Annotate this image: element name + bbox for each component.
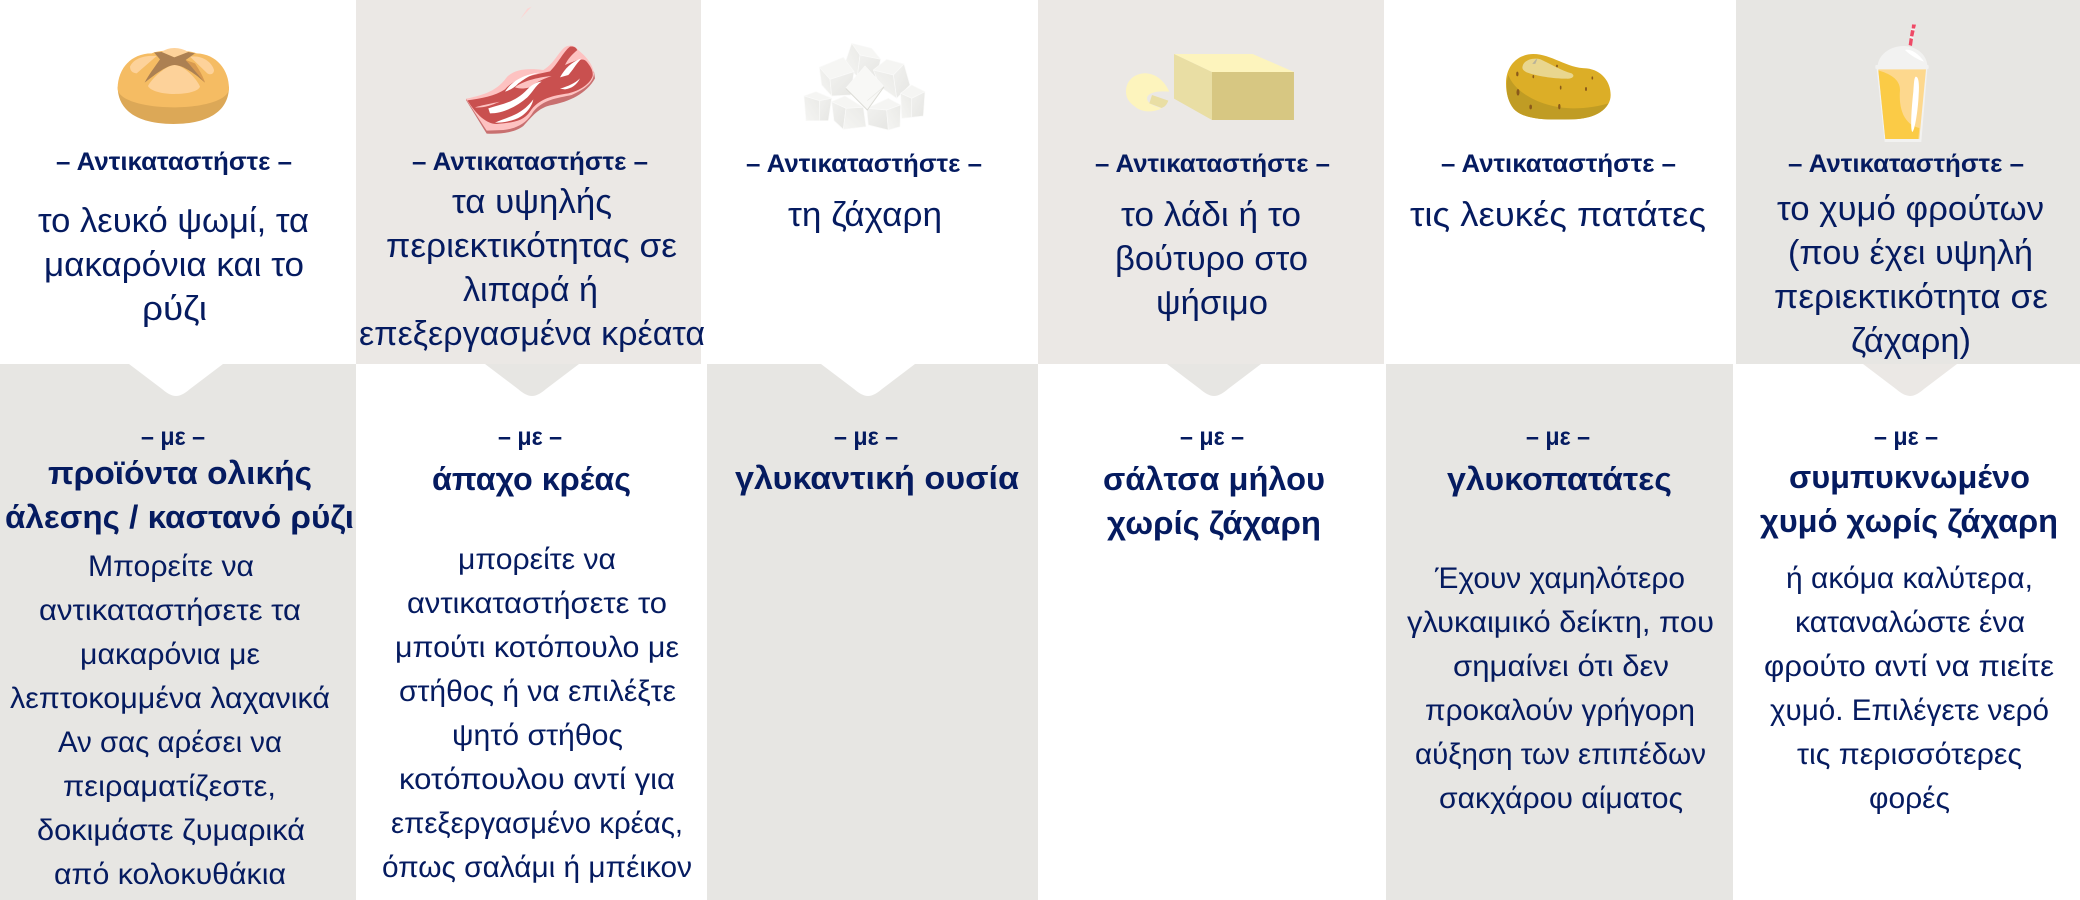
label: replace: – Αντικαταστήστε – <box>412 148 648 176</box>
label: with: – με – <box>1180 423 1244 451</box>
arrow: notch <box>1167 364 1261 396</box>
text: juice details: τις περισσότερες <box>1797 738 2022 771</box>
text: lean meat details: όπως σαλάμι ή μπέικον <box>382 851 692 884</box>
panel: sweetener alternative <box>707 364 1038 900</box>
text: lean meat details: ψητό στήθος <box>452 719 623 752</box>
text: whole grain details: Αν σας αρέσει να <box>58 726 282 759</box>
text: sweet potato details: σακχάρου αίματος <box>1439 782 1683 815</box>
text: lean meat details: κοτόπουλου αντί για <box>399 763 675 796</box>
text: oil or butter in baking: το λάδι ή το <box>1121 196 1301 234</box>
panel: replace sugar <box>701 0 1038 364</box>
text: juice details: φορές <box>1869 782 1950 815</box>
heading: sugar-free concentrated juice <box>1760 459 2058 539</box>
text: whole grain details: πειραματίζεστε, <box>63 770 276 803</box>
icon: bread roll <box>118 48 229 124</box>
text: lean meat details: μπορείτε να <box>458 543 616 576</box>
text: white bread, pasta, rice: το λευκό ψωμί, τα <box>38 202 309 240</box>
arrow: notch <box>821 364 915 396</box>
panel: replace white potatoes <box>1384 0 1736 364</box>
panel: concentrated juice alternative <box>1733 364 2080 900</box>
text: lean meat details <box>382 543 692 884</box>
text: fatty or processed meats: λιπαρά ή <box>463 271 598 309</box>
text: whole grain details: μακαρόνια με <box>80 638 260 671</box>
text: juice details: καταναλώστε ένα <box>1795 606 2025 639</box>
panel: replace fruit juice <box>1736 0 2080 364</box>
label: replace: – Αντικαταστήστε – <box>746 150 982 178</box>
text: sweet potato details: αύξηση των επιπέδων <box>1415 738 1706 771</box>
text: whole grain details: αντικαταστήσετε τα <box>39 594 301 627</box>
text: sweet potato details: σημαίνει ότι δεν <box>1453 650 1669 683</box>
text: whole grain details <box>10 550 330 891</box>
text: fatty or processed meats <box>359 183 705 353</box>
text: fatty or processed meats: περιεκτικότητας σε <box>386 227 677 265</box>
text: fruit juice: το χυμό φρούτων <box>1777 190 2044 228</box>
panel: replace oil or butter <box>1038 0 1384 364</box>
text: fruit juice <box>1774 190 2048 360</box>
icon: juice cup with straw <box>1875 24 1929 142</box>
icon: bacon <box>466 7 595 134</box>
panel: apple sauce alternative <box>1038 364 1386 900</box>
text: oil or butter in baking: ψήσιμο <box>1156 284 1268 322</box>
label: replace: – Αντικαταστήστε – <box>1441 150 1676 178</box>
heading: whole grain products: προϊόντα ολικής <box>48 455 312 491</box>
text: lean meat details: στήθος ή να επιλέξτε <box>399 675 676 708</box>
text: juice details: φρούτο αντί να πιείτε <box>1764 650 2054 683</box>
text: sweet potato details <box>1407 562 1714 815</box>
heading: whole grain products: άλεσης / καστανό ρύζι <box>5 499 354 535</box>
heading: sugar-free concentrated juice: συμπυκνωμένο <box>1789 459 2030 495</box>
label: with: – με – <box>834 423 898 451</box>
label: with: – με – <box>141 423 205 451</box>
icon: butter block <box>1126 54 1294 120</box>
heading: sugar-free apple sauce <box>1103 461 1325 541</box>
panel: lean meat alternative <box>356 364 707 900</box>
label: replace: – Αντικαταστήστε – <box>56 148 292 176</box>
text: fatty or processed meats: επεξεργασμένα κρέατα <box>359 315 705 353</box>
text: sweet potato details: προκαλούν γρήγορη <box>1425 694 1695 727</box>
text: white bread, pasta, rice <box>38 202 309 328</box>
text: oil or butter in baking <box>1115 196 1308 322</box>
panel: replace bread <box>0 0 356 364</box>
text: white bread, pasta, rice: ρύζι <box>142 290 207 328</box>
heading: lean meat: άπαχο κρέας <box>432 461 631 497</box>
label: replace: – Αντικαταστήστε – <box>1788 150 2024 178</box>
text: fruit juice: ζάχαρη) <box>1851 322 1971 360</box>
text: juice details <box>1764 562 2054 815</box>
panel: whole grain alternative <box>0 364 356 900</box>
arrow: notch <box>129 364 223 396</box>
text: whole grain details: δοκιμάστε ζυμαρικά <box>37 814 305 847</box>
text: juice details: χυμό. Επιλέγετε νερό <box>1770 694 2049 727</box>
heading: sugar-free concentrated juice: χυμό χωρίς ζάχαρη <box>1760 503 2058 539</box>
text: fruit juice: (που έχει υψηλή <box>1788 234 2033 272</box>
text: whole grain details: λεπτοκομμένα λαχανικά <box>10 682 330 715</box>
text: fruit juice: περιεκτικότητα σε <box>1774 278 2048 316</box>
text: sweet potato details: Έχουν χαμηλότερο <box>1434 562 1685 595</box>
heading: sweet potatoes: γλυκοπατάτες <box>1447 461 1672 497</box>
text: white bread, pasta, rice: μακαρόνια και το <box>44 246 304 284</box>
text: fatty or processed meats: τα υψηλής <box>452 183 612 221</box>
text: lean meat details: επεξεργασμένο κρέας, <box>391 807 683 840</box>
heading: whole grain products <box>5 455 354 535</box>
text: juice details: ή ακόμα καλύτερα, <box>1786 562 2033 595</box>
arrow: notch <box>1863 364 1957 396</box>
text: white potatoes: τις λευκές πατάτες <box>1410 196 1706 234</box>
text: oil or butter in baking: βούτυρο στο <box>1115 240 1308 278</box>
text: sugar: τη ζάχαρη <box>788 196 942 234</box>
label: with: – με – <box>498 423 562 451</box>
text: whole grain details: από κολοκυθάκια <box>54 858 286 891</box>
text: whole grain details: Μπορείτε να <box>88 550 254 583</box>
icon: sugar cubes <box>804 43 925 130</box>
text: sweet potato details: γλυκαιμικό δείκτη, που <box>1407 606 1714 639</box>
heading: sugar-free apple sauce: χωρίς ζάχαρη <box>1107 505 1321 541</box>
text: lean meat details: μπούτι κοτόπουλο με <box>395 631 679 664</box>
label: with: – με – <box>1874 423 1938 451</box>
heading: sweetener: γλυκαντική ουσία <box>735 460 1019 496</box>
arrow: notch <box>485 364 579 396</box>
icon: potato <box>1506 54 1611 120</box>
panel: sweet potato alternative <box>1386 364 1733 900</box>
heading: sugar-free apple sauce: σάλτσα μήλου <box>1103 461 1325 497</box>
label: with: – με – <box>1526 423 1590 451</box>
panel: replace fatty meat <box>356 0 705 364</box>
text: lean meat details: αντικαταστήσετε το <box>407 587 667 620</box>
label: replace: – Αντικαταστήστε – <box>1095 150 1330 178</box>
